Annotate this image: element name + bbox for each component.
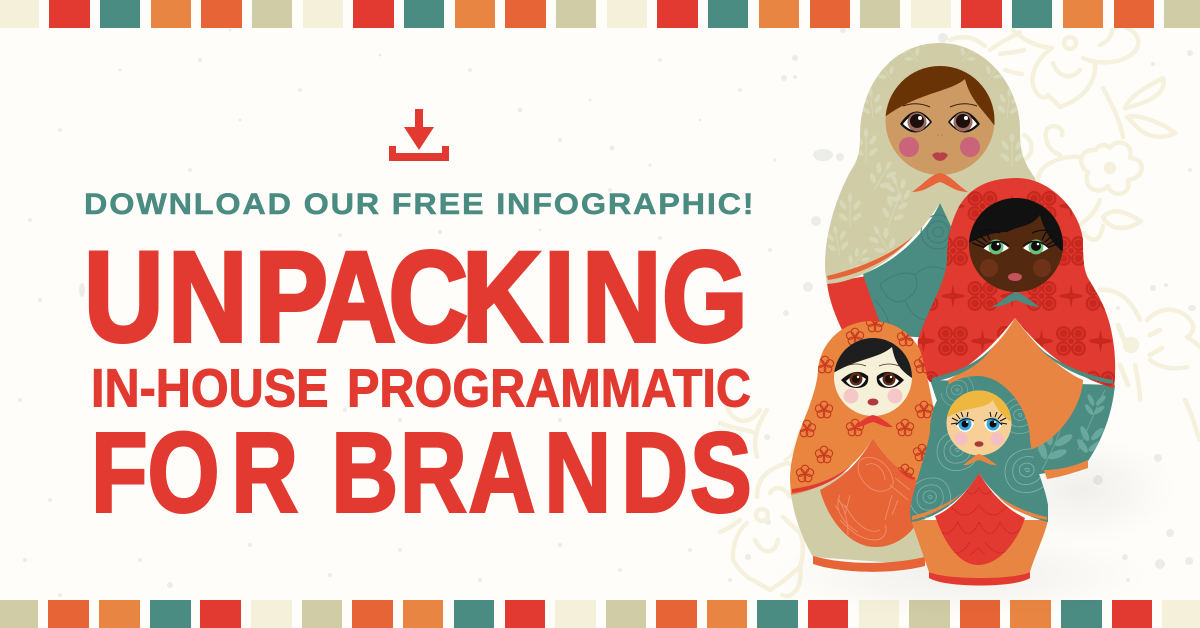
doll 2 eyes: [972, 230, 1060, 254]
doll 2: red doll: [918, 178, 1115, 479]
doll 1 face: [886, 66, 994, 175]
doll 4 hair: [947, 390, 1012, 422]
doll 2 face: [969, 198, 1063, 292]
title: [84, 226, 752, 536]
illustration: nesting dolls: [790, 34, 1115, 585]
doll 1 red body: [827, 270, 900, 340]
doll 2 leaf pattern: [1038, 390, 1106, 470]
doll 2 cheeks: [980, 259, 1051, 277]
doll 1 orange trim: [827, 236, 913, 280]
doll 1 teal apron: [863, 203, 960, 340]
doll 2 hood: [918, 178, 1115, 388]
doll 3 face: [834, 338, 912, 416]
doll 4 orange trim: [912, 492, 1047, 520]
doll 4 orange body: [911, 520, 1048, 580]
doll 3 apron: [820, 438, 925, 547]
icon: download arrow into tray: [389, 109, 449, 161]
bottom colour strip: [0, 600, 1200, 628]
doll 4 scallop pattern: [942, 487, 1022, 556]
doll 4 lips: [974, 441, 984, 447]
doll 3 base band: [813, 556, 925, 572]
doll 3 scarf knot: [853, 415, 893, 427]
title line 2: PROGRAMMATIC: [347, 357, 751, 418]
doll 2 teal trim: [932, 347, 1113, 384]
doll 1 scarf knot: [912, 173, 968, 192]
doll 3 cheeks: [844, 388, 902, 404]
doll 2 hood ornament pattern: [918, 178, 1115, 388]
doll 3 red trim: [792, 464, 916, 493]
doll 4 hood: [910, 376, 1048, 522]
doll 2 lips: [1008, 273, 1022, 281]
doll 4 scarf knot: [963, 454, 997, 465]
doll 3 lips: [868, 398, 878, 406]
doll 4 cheeks: [954, 432, 1004, 446]
top colour strip: [0, 0, 1200, 28]
doll 2 scarf knot: [992, 292, 1040, 307]
doll 2 orange apron: [948, 318, 1083, 450]
doll 4 eyes: [951, 412, 1007, 432]
doll 3 khaki body: [791, 470, 925, 565]
doll 4 base band: [929, 572, 1030, 586]
doll 3 apron floral line art: [835, 458, 910, 540]
title line 3: FOR BRANDS: [91, 409, 752, 536]
doll 2 orange base band: [1044, 460, 1088, 479]
doll 1 hair: [886, 66, 994, 126]
doll 1 lips: [932, 152, 948, 161]
doll 4 hood roses: [910, 375, 1050, 517]
doll 1 hood leaf pattern: [828, 48, 1023, 270]
doll 4 face: [946, 390, 1012, 456]
doll 2 hair: [969, 198, 1063, 252]
doll 4: small teal doll: [910, 375, 1050, 586]
doll 4 red apron: [935, 473, 1025, 565]
doll 1 eyes: [900, 104, 980, 133]
floor shadows: [770, 435, 1175, 620]
doll 1: large khaki doll: [823, 34, 1040, 340]
doll 2 teal body: [930, 380, 1115, 478]
subheading: DOWNLOAD OUR FREE INFOGRAPHIC!: [84, 187, 754, 221]
doll 1 cheeks: [899, 137, 980, 157]
doll 3 hair: [834, 338, 912, 378]
floral background illustration: [720, 28, 1200, 596]
doll 3 hood blossoms: [796, 315, 933, 482]
title line 2: IN-HOUSE: [91, 357, 329, 418]
doll 3 eyes: [841, 364, 904, 388]
doll 1 nose: [937, 134, 943, 136]
doll 3: orange doll: [790, 315, 945, 572]
doll 1 apron line art: [875, 215, 955, 335]
doll 3 hood: [790, 321, 945, 495]
title line 1: UNPACKING: [84, 226, 748, 369]
doll 1 hood: [825, 43, 1040, 284]
